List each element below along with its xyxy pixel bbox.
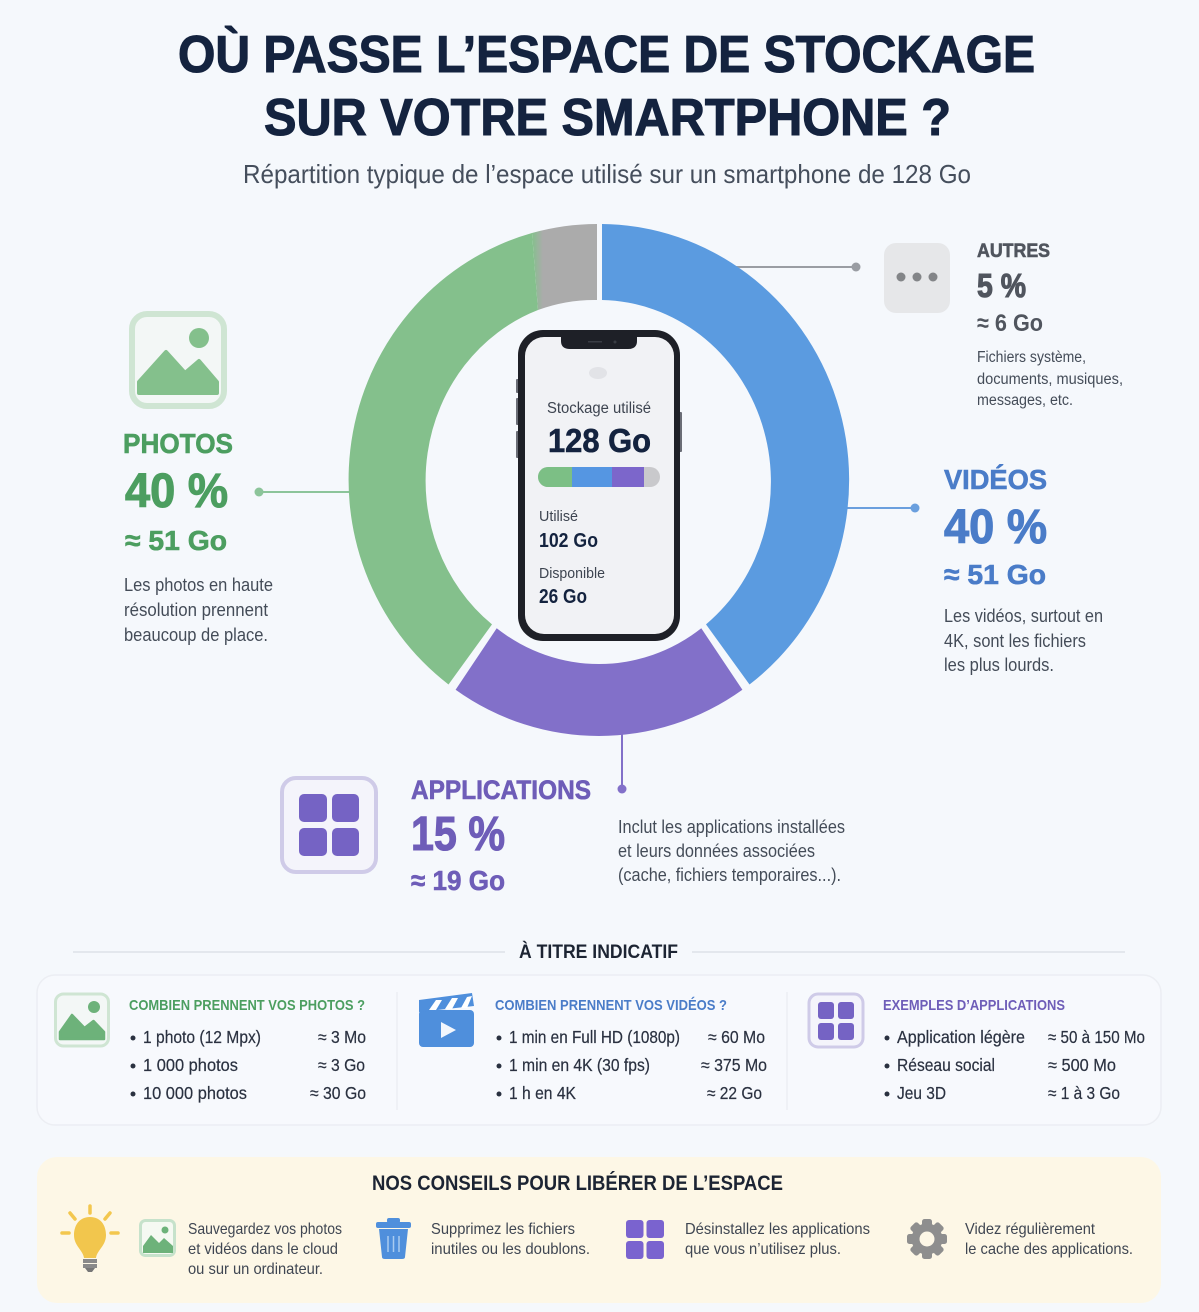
column: vidéos: ≈ 60 Mo (708, 1027, 765, 1047)
phone text: stockage utilisé: Stockage utilisé (547, 400, 651, 417)
panel: autres: documents, musiques, (977, 371, 1123, 388)
panel: autres: 5 % (977, 267, 1026, 304)
panel: repères (37, 975, 1161, 1125)
title (178, 26, 1035, 147)
panel: applications: et leurs données associées (618, 841, 815, 861)
text: tip applications (685, 1221, 870, 1258)
icon: photos small (56, 994, 108, 1046)
panel: photos: ≈ 51 Go (125, 525, 227, 556)
column: vidéos: COMBIEN PRENNENT VOS VIDÉOS ? (495, 997, 727, 1014)
heading: à titre indicatif: À TITRE INDICATIF (519, 940, 678, 963)
column: photos (129, 997, 366, 1103)
subtitle: Répartition typique de l’espace utilisé sur un smartphone de 128 Go (243, 159, 971, 189)
panel: vidéos: Les vidéos, surtout en (944, 606, 1103, 626)
column: vidéos: ≈ 375 Mo (701, 1055, 767, 1075)
panel: applications: (cache, fichiers temporaires...). (618, 865, 841, 885)
panel: conseils (37, 1157, 1161, 1303)
text: tip cache (965, 1221, 1133, 1258)
segment: applications 15 % (456, 628, 742, 736)
connector: vidéos (846, 504, 920, 512)
panel: autres: messages, etc. (977, 392, 1073, 409)
column: applications: ≈ 1 à 3 Go (1048, 1083, 1120, 1103)
column: vidéos (495, 997, 767, 1103)
panel: applications (411, 775, 845, 896)
column: vidéos: 1 min en Full HD (1080p) (509, 1027, 680, 1047)
icon: photo tip (140, 1220, 174, 1256)
panel: vidéos (944, 464, 1103, 675)
segment: autres 5 % (532, 224, 597, 310)
column: vidéos: 1 min en 4K (30 fps) (509, 1055, 650, 1075)
phone text: disponible: Disponible (539, 565, 605, 582)
panel: photos: résolution prennent (124, 600, 268, 620)
column: applications: ≈ 50 à 150 Mo (1048, 1027, 1145, 1047)
icon: light bulb (62, 1206, 118, 1272)
column: photos: 1 photo (12 Mpx) (143, 1027, 261, 1047)
phone storage bar (538, 467, 660, 487)
heading: conseils: NOS CONSEILS POUR LIBÉRER DE L’ESPACE (372, 1170, 783, 1195)
panel: vidéos: ≈ 51 Go (944, 559, 1046, 590)
column: vidéos: 1 h en 4K (509, 1083, 576, 1103)
column: applications: Jeu 3D (897, 1083, 946, 1103)
connector: photos (254, 488, 352, 496)
panel: autres (977, 240, 1123, 409)
text: tip applications: que vous n’utilisez plus. (685, 1241, 841, 1258)
icon: gear (907, 1219, 947, 1259)
panel: vidéos: VIDÉOS (944, 464, 1047, 495)
panel: applications: Inclut les applications installées (618, 817, 845, 837)
column: photos: COMBIEN PRENNENT VOS PHOTOS ? (129, 997, 365, 1014)
panel: autres: Fichiers système, (977, 349, 1086, 366)
panel: applications: ≈ 19 Go (411, 865, 505, 896)
panel: photos: 40 % (125, 465, 228, 518)
title: OÙ PASSE L’ESPACE DE STOCKAGE (178, 26, 1035, 84)
icon: apps tip (626, 1220, 664, 1259)
panel: photos: PHOTOS (123, 428, 233, 459)
column: photos: ≈ 3 Go (318, 1055, 365, 1075)
connector: applications (618, 732, 626, 794)
panel: vidéos: 40 % (944, 501, 1047, 554)
segment: photos 40 % (349, 233, 538, 684)
text: tip cache: le cache des applications. (965, 1241, 1133, 1258)
connector: autres (735, 262, 860, 272)
text: tip fichiers: Supprimez les fichiers (431, 1221, 575, 1238)
column: photos: ≈ 3 Mo (318, 1027, 366, 1047)
donut chart (349, 224, 849, 736)
text: tip applications: Désinstallez les applications (685, 1221, 870, 1238)
icon: applications (282, 778, 376, 872)
column: photos: 10 000 photos (143, 1083, 247, 1103)
column: applications: ≈ 500 Mo (1048, 1055, 1116, 1075)
text: tip cloud: et vidéos dans le cloud (188, 1241, 338, 1258)
panel: applications: APPLICATIONS (411, 775, 591, 805)
column: applications: Réseau social (897, 1055, 995, 1075)
column: photos: ≈ 30 Go (310, 1083, 366, 1103)
phone text: 102 Go: 102 Go (539, 530, 598, 552)
panel: vidéos: 4K, sont les fichiers (944, 631, 1086, 651)
text: tip cloud: Sauvegardez vos photos (188, 1221, 342, 1238)
panel: photos (123, 428, 273, 645)
column: vidéos: ≈ 22 Go (707, 1083, 762, 1103)
text: tip fichiers: inutiles ou les doublons. (431, 1241, 590, 1258)
text: tip fichiers (431, 1221, 590, 1258)
column: applications (883, 997, 1145, 1103)
text: tip cloud: ou sur un ordinateur. (188, 1261, 323, 1278)
title: SUR VOTRE SMARTPHONE ? (264, 89, 951, 147)
panel: autres: AUTRES (977, 240, 1050, 262)
column: photos: 1 000 photos (143, 1055, 238, 1075)
segment: vidéos 40 % (602, 224, 849, 684)
icon: apps small (809, 994, 863, 1047)
panel: vidéos: les plus lourds. (944, 655, 1054, 675)
icon: clapperboard (419, 993, 474, 1047)
phone text: 26 Go: 26 Go (539, 586, 587, 608)
icon: autres (884, 243, 950, 313)
phone text: 128 Go: 128 Go (548, 422, 651, 459)
phone text: utilisé: Utilisé (539, 508, 578, 525)
text: tip cloud (188, 1221, 342, 1278)
panel: applications: 15 % (411, 808, 505, 861)
icon: trash (376, 1218, 411, 1259)
panel: autres: ≈ 6 Go (977, 310, 1043, 337)
column: applications: EXEMPLES D’APPLICATIONS (883, 997, 1065, 1014)
panel: photos: Les photos en haute (124, 575, 273, 595)
icon: photos (132, 314, 224, 406)
text: tip cache: Videz régulièrement (965, 1221, 1096, 1238)
phone (516, 330, 682, 641)
panel: photos: beaucoup de place. (124, 625, 268, 645)
column: applications: Application légère (897, 1027, 1025, 1047)
